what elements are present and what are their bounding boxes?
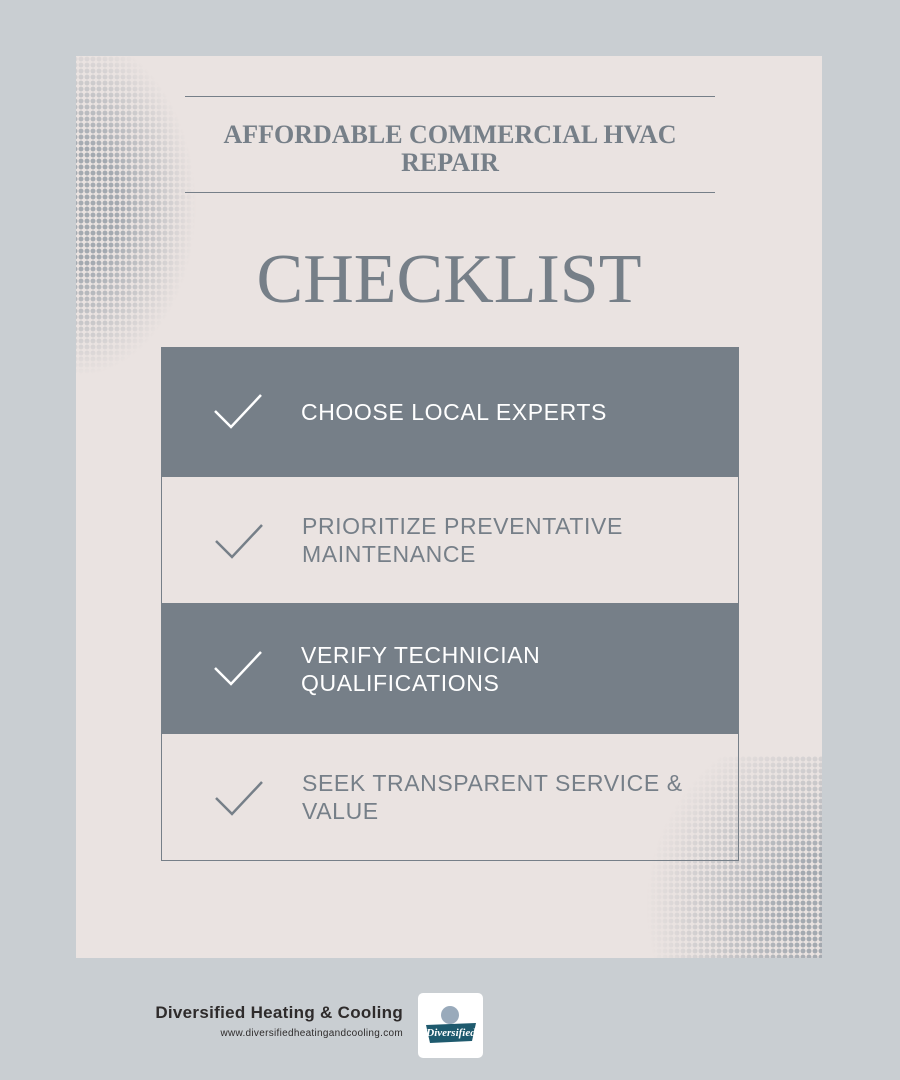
item 2: [161, 476, 739, 604]
item 2: MAINTENANCE: [302, 541, 476, 567]
footer: company name: www.diversifiedheatingandcooling.com: [220, 1028, 403, 1039]
halftone top-left: [76, 56, 186, 362]
title: AFFORDABLE COMMERCIAL HVAC: [223, 120, 677, 149]
item 3: QUALIFICATIONS: [301, 670, 499, 696]
item 4: [161, 733, 739, 861]
item 4: SEEK TRANSPARENT SERVICE &: [302, 770, 683, 796]
icon: logo: Diversified: [425, 1027, 476, 1039]
halftone bottom-right: [663, 756, 822, 958]
item 2: PRIORITIZE PREVENTATIVE: [302, 513, 623, 539]
footer: company name: [155, 1003, 403, 1039]
item 4: VALUE: [302, 798, 379, 824]
title: [185, 96, 715, 193]
item 3: [161, 604, 739, 733]
item 3: VERIFY TECHNICIAN: [301, 642, 540, 668]
icon: logo: [418, 993, 483, 1058]
heading: checklist: CHECKLIST: [256, 241, 642, 318]
title: REPAIR: [401, 148, 499, 177]
item 1: [161, 347, 739, 476]
item 1: CHOOSE LOCAL EXPERTS: [301, 398, 607, 424]
panel: card: [76, 56, 822, 958]
footer: company name: Diversified Heating & Cooling: [155, 1003, 403, 1022]
